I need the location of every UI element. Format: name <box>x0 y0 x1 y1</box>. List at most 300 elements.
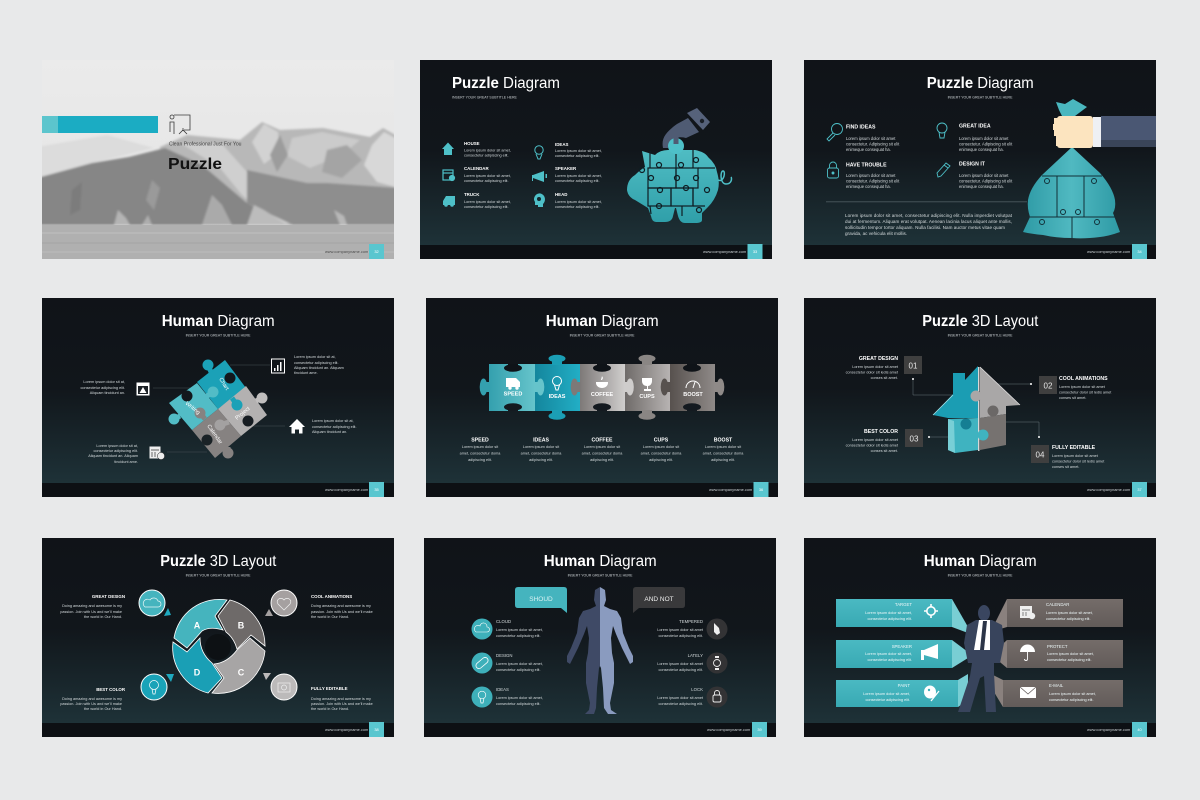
text: best color: Doing amazing and awesome is my <box>62 697 122 701</box>
footer url: www.companyname.com <box>325 249 368 254</box>
text: ideas <box>496 687 543 706</box>
jigsaw diamond <box>168 360 268 458</box>
text: cool animations: the world in Our Hand. <box>311 615 349 619</box>
text: design it: DESIGN IT <box>959 162 986 168</box>
text: great idea: consectetur. Adipiscing sit elit <box>959 142 1013 146</box>
text: lately: consectetur adipiscing elit. <box>658 668 703 672</box>
human figure <box>567 587 633 714</box>
column: boost: Lorem ipsum dolor sit <box>705 445 742 449</box>
segment labels: B <box>238 620 245 630</box>
text: design it: enimeque consequat ha. <box>959 184 1004 189</box>
connector lines <box>913 379 1039 437</box>
text: target: Lorem ipsum dolor sit amet, <box>865 611 912 615</box>
subtitle: INSERT YOUR GREAT SUBTITLE HERE <box>452 96 517 100</box>
text: have trouble: HAVE TROUBLE <box>846 162 887 168</box>
text: best color <box>846 429 899 453</box>
text: best color: conses sit amet. <box>871 449 898 453</box>
ribbon: e-mail <box>989 673 1123 707</box>
slide background <box>804 538 1156 737</box>
segment labels: A <box>194 620 201 630</box>
text: lock: Lorem ipsum dolor sit amet <box>657 696 704 700</box>
column: speed: SPEED <box>471 438 489 444</box>
icon: palette <box>924 686 939 701</box>
text: great design: the world in Our Hand. <box>84 615 122 619</box>
text: lately: LATELY <box>688 653 703 658</box>
footer bar <box>420 245 772 259</box>
text: speaker: SPEAKER <box>892 644 912 649</box>
label: speed: SPEED <box>504 392 522 398</box>
speech bubble: shoud: SHOUD <box>529 596 553 603</box>
subtitle: INSERT YOUR GREAT SUBTITLE HERE <box>568 574 633 578</box>
page number tab: 34 <box>1137 249 1142 254</box>
text: e-mail: E-MAIL <box>1049 683 1064 688</box>
page number tab <box>1132 722 1147 737</box>
text: top right: Aliquam tincidunt an. Aliquam <box>294 366 344 370</box>
column: cups <box>641 438 682 462</box>
text: protect: PROTECT <box>1047 644 1068 649</box>
page number tab <box>754 482 768 497</box>
text: lately <box>657 653 704 672</box>
text: top right: tincidunt ame. <box>294 371 318 375</box>
column: speed: adipiscing elit. <box>468 458 492 462</box>
text: left <box>80 380 125 395</box>
column: speed <box>460 438 501 462</box>
icon: target <box>924 604 938 618</box>
text: fully editable <box>1052 445 1105 469</box>
text: house: consectetur adipiscing elit. <box>464 154 509 158</box>
text: cloud: CLOUD <box>496 619 511 624</box>
text: bottom left: Lorem ipsum dolor sit at, <box>96 444 138 448</box>
text: head: consectetur adipiscing elit. <box>555 205 600 209</box>
text: great design <box>60 594 125 619</box>
page number tab: 38 <box>374 727 379 732</box>
page number tab <box>748 244 762 259</box>
title: Puzzle Diagram <box>927 75 1034 92</box>
text: design it: Lorem ipsum dolor sit amet <box>959 173 1009 178</box>
text: best color: consectetur dolor sit ledis amet <box>846 444 899 448</box>
text: cool animations: consectetur dolor sit ledis amet <box>1059 390 1112 394</box>
text: best color: BEST COLOR <box>96 687 126 692</box>
text: fully editable: conses sit amet. <box>1052 465 1079 469</box>
text: fully editable: FULLY EDITABLE <box>311 686 348 691</box>
text: target: consectetur adipiscing elit. <box>867 617 912 621</box>
text: have trouble: enimeque consequat ha. <box>846 184 891 189</box>
icon: gauge <box>686 381 700 388</box>
text: speaker: SPEAKER <box>555 166 577 171</box>
text: left: Aliquam tincidunt an. <box>90 391 125 395</box>
column: cups: amet, consectetur doma <box>641 452 682 456</box>
text: speaker <box>555 166 602 183</box>
icon: bulb <box>535 146 543 159</box>
text: great design: Doing amazing and awesome is my <box>62 604 122 608</box>
paragraph: gravida, ac vehicula elit mollis. <box>845 231 907 236</box>
text: ideas: IDEAS <box>496 687 509 692</box>
text: truck: consectetur adipiscing elit. <box>464 205 509 209</box>
connector lines <box>153 365 285 452</box>
circle icon: bandage <box>472 652 492 674</box>
footer bar <box>424 723 776 737</box>
text: find ideas <box>846 124 900 152</box>
text: target <box>865 602 912 621</box>
text: cool animations <box>311 594 373 619</box>
speech bubble: and not <box>633 587 685 613</box>
icon: umbrella <box>1020 644 1035 660</box>
label: ideas: IDEAS <box>549 394 566 400</box>
ribbon: target <box>836 599 968 633</box>
teal bar accent <box>42 116 158 133</box>
hand holding bag <box>1053 116 1156 148</box>
page number tab: 40 <box>1137 727 1142 732</box>
column: cups: adipiscing elit. <box>649 458 673 462</box>
footer url: www.companyname.com <box>1087 249 1130 254</box>
piece label: chart: Chart <box>217 377 230 392</box>
label: coffee: COFFEE <box>591 392 613 398</box>
circle icon: cloud <box>139 590 165 616</box>
text: ideas: consectetur adipiscing elit. <box>496 702 541 706</box>
text: right: Aliquam tincidunt an. <box>312 430 347 434</box>
text: great design: conses sit amet. <box>871 376 898 380</box>
text: speaker <box>865 644 912 662</box>
page number tab <box>369 244 384 259</box>
circle icon: heart <box>271 590 297 616</box>
label: boost: BOOST <box>683 392 703 398</box>
slide background <box>42 298 394 497</box>
text: calendar: CALENDAR <box>1046 602 1069 607</box>
text: e-mail: Lorem ipsum dolor sit amet, <box>1049 692 1096 696</box>
title: Human Diagram <box>924 553 1037 570</box>
paragraph <box>845 213 1013 236</box>
page number tab: 39 <box>757 727 762 732</box>
text: top right: consectetur adipiscing elit. <box>294 361 339 365</box>
text: best color: Lorem ipsum dolor sit amet <box>852 438 899 442</box>
text: great design: Lorem ipsum dolor sit amet <box>852 365 899 369</box>
text: calendar: consectetur adipiscing elit. <box>464 179 509 183</box>
label: cups: CUPS <box>639 394 655 400</box>
number box 04: 04 <box>1036 450 1045 460</box>
text: paint <box>863 683 910 702</box>
icon: envelope <box>1020 687 1036 698</box>
panel: five piece puzzle row <box>426 298 778 497</box>
icon: calendar check <box>1020 606 1035 619</box>
icon: megaphone <box>921 644 938 660</box>
footer url: www.companyname.com <box>325 727 368 732</box>
segment labels: C <box>238 668 245 678</box>
text: cool animations: COOL ANIMATIONS <box>311 594 352 599</box>
text: truck: TRUCK <box>464 192 480 197</box>
piece label: project: Project <box>234 406 252 422</box>
subtitle: INSERT YOUR GREAT SUBTITLE HERE <box>948 574 1013 578</box>
page number tab <box>369 722 384 737</box>
text: calendar <box>464 166 511 183</box>
text: fully editable: Lorem ipsum dolor sit amet <box>1052 454 1099 458</box>
column: speed: amet, consectetur doma <box>460 452 501 456</box>
page number tab <box>1132 482 1147 497</box>
footer url: www.companyname.com <box>1087 727 1130 732</box>
number box 03 <box>905 429 923 447</box>
text: fully editable: Doing amazing and awesome is my <box>311 697 371 701</box>
column: coffee: COFFEE <box>591 438 613 444</box>
column: speed: Lorem ipsum dolor sit <box>462 445 499 449</box>
column: cups: Lorem ipsum dolor sit <box>643 445 680 449</box>
ribbon: protect <box>993 640 1123 668</box>
icon: presenter at board <box>170 115 190 134</box>
number box 02 <box>1039 376 1057 394</box>
footer bar <box>804 245 1156 259</box>
page number tab: 36 <box>759 487 763 492</box>
text: find ideas: consectetur. Adipiscing sit elit <box>846 142 900 146</box>
circle icon: bulb <box>472 686 492 708</box>
text: head <box>555 192 602 209</box>
column: ideas: amet, consectetur doma <box>521 452 562 456</box>
text: right: Lorem ipsum dolor sit at, <box>312 419 354 423</box>
piece label: writing: Writing <box>184 401 201 416</box>
text: speaker: Lorem ipsum dolor sit amet, <box>555 174 602 178</box>
column: coffee: amet, consectetur doma <box>582 452 623 456</box>
text: have trouble: consectetur. Adipiscing sit elit <box>846 178 900 184</box>
text: e-mail <box>1049 683 1096 702</box>
text: find ideas: Lorem ipsum dolor sit amet <box>846 136 896 141</box>
icon: padlock <box>828 162 838 178</box>
text: calendar: consectetur adipiscing elit. <box>1046 617 1091 621</box>
text: cool animations: COOL ANIMATIONS <box>1059 376 1108 382</box>
text: tempered: consectetur adipiscing elit. <box>658 634 703 638</box>
piggy bank <box>627 108 731 223</box>
text: lately: Lorem ipsum dolor sit amet <box>657 662 704 666</box>
text: top right <box>294 355 344 375</box>
icon: calendar check <box>150 446 165 460</box>
text: ideas: Lorem ipsum dolor sit amet, <box>555 149 602 153</box>
text: paint: PAINT <box>898 683 910 688</box>
text: speaker: Lorem ipsum dolor sit amet, <box>865 652 912 656</box>
page number tab: 35 <box>374 487 379 492</box>
text: great design: GREAT DESIGN <box>92 594 125 599</box>
3D puzzle house <box>933 366 1020 453</box>
text: tempered: TEMPERED <box>679 619 703 624</box>
text: best color: the world in Our Hand. <box>84 707 122 711</box>
photo: grayscale mountain lake <box>42 121 394 259</box>
text: cloud: Lorem ipsum dolor sit amet, <box>496 628 543 632</box>
text: ideas: Lorem ipsum dolor sit amet, <box>496 696 543 700</box>
icon: trophy <box>642 378 652 391</box>
title: Human Diagram <box>544 553 657 570</box>
icon: house <box>442 142 454 155</box>
title: Human Diagram <box>162 313 275 330</box>
panel: money bag puzzle <box>804 60 1156 259</box>
text: design it <box>959 162 1013 189</box>
number box 01 <box>904 356 922 374</box>
puzzle row <box>480 355 724 420</box>
text: great design: passion. Join with Us and we'll make <box>60 610 122 614</box>
text: design: DESIGN <box>496 653 512 658</box>
text: calendar: CALENDAR <box>464 166 489 171</box>
text: great design: GREAT DESIGN <box>859 356 898 362</box>
text: lock <box>657 687 704 706</box>
column: boost: amet, consectetur doma <box>703 452 744 456</box>
text: house: Lorem ipsum dolor sit amet, <box>464 148 511 152</box>
pointer triangles <box>164 608 273 682</box>
text: fully editable <box>311 686 373 711</box>
text: right <box>312 419 357 434</box>
text: cloud: consectetur adipiscing elit. <box>496 634 541 638</box>
icon: pencil <box>937 163 950 177</box>
slide background <box>420 60 772 259</box>
ribbon: speaker <box>836 640 968 668</box>
text: bottom left: consectetur adipiscing elit. <box>93 449 138 453</box>
column: coffee <box>582 438 623 462</box>
circle icon: camera <box>271 674 297 700</box>
icon: magnifier <box>827 124 842 141</box>
cover title: Puzzle <box>168 156 222 173</box>
page number tab: 33 <box>753 249 757 254</box>
text: ideas <box>555 142 602 158</box>
circle icon: bulb <box>141 674 167 700</box>
text: target: TARGET <box>895 602 912 607</box>
text: bottom left <box>88 444 138 464</box>
text: fully editable: the world in Our Hand. <box>311 707 349 711</box>
title: Puzzle 3D Layout <box>922 313 1039 330</box>
subtitle: INSERT YOUR GREAT SUBTITLE HERE <box>186 334 251 338</box>
text: design: Lorem ipsum dolor sit amet, <box>496 662 543 666</box>
text: tempered <box>657 619 704 638</box>
page number tab: 32 <box>374 249 379 254</box>
text: best color: passion. Join with Us and we'll make <box>60 702 122 706</box>
icon: head <box>534 193 545 207</box>
text: have trouble: Lorem ipsum dolor sit amet <box>846 173 896 178</box>
text: lock: consectetur adipiscing elit. <box>658 702 703 706</box>
page number tab <box>1132 244 1147 259</box>
text: cool animations <box>1059 376 1112 400</box>
text: protect <box>1047 644 1094 662</box>
column: coffee: Lorem ipsum dolor sit <box>584 445 621 449</box>
text: great idea <box>959 124 1013 152</box>
footer bar <box>804 723 1156 737</box>
number box 02: 02 <box>1044 382 1053 390</box>
circle icon: watch <box>706 652 728 674</box>
text: paint: Lorem ipsum dolor sit amet, <box>863 692 910 696</box>
text: calendar: Lorem ipsum dolor sit amet, <box>464 174 511 178</box>
icon: coffee cup <box>596 376 608 388</box>
paragraph: sollicitudin tempor tortor aliquam. Nulla facilisi. Nam auctor metus vitae quam <box>845 225 1005 230</box>
icon: calendar <box>443 170 454 180</box>
footer url: www.companyname.com <box>1087 487 1130 492</box>
icon: home <box>289 419 305 434</box>
segment labels <box>194 620 245 678</box>
panel: cover slide <box>42 114 394 259</box>
businessman silhouette <box>958 605 1004 712</box>
footer url: www.companyname.com <box>325 487 368 492</box>
text: cloud <box>496 619 543 638</box>
panel: piggy bank puzzle <box>420 60 772 259</box>
icon: warning window <box>136 382 150 396</box>
text: head: Lorem ipsum dolor sit amet, <box>555 200 602 204</box>
text: fully editable: consectetur dolor sit ledis amet <box>1052 460 1105 464</box>
text: left: consectetur adipiscing elit. <box>80 386 125 390</box>
text: speaker: consectetur adipiscing elit. <box>867 658 912 662</box>
text: left: Lorem ipsum dolor sit at, <box>83 380 125 384</box>
footer url: www.companyname.com <box>709 487 752 492</box>
number box 03: 03 <box>910 434 919 444</box>
text: have trouble <box>846 162 900 189</box>
number box 01: 01 <box>909 362 918 370</box>
icon: bar chart <box>272 359 284 373</box>
slide background <box>424 538 776 737</box>
text: tempered: Lorem ipsum dolor sit amet <box>657 628 704 632</box>
text: house: HOUSE <box>464 141 480 146</box>
circle icon: flame hand <box>706 618 728 640</box>
text: fully editable: FULLY EDITABLE <box>1052 445 1096 451</box>
panel: circular ABCD cycle <box>42 538 394 737</box>
text: design: consectetur adipiscing elit. <box>496 668 541 672</box>
text: truck: Lorem ipsum dolor sit amet, <box>464 200 511 204</box>
title: Human Diagram <box>546 313 659 330</box>
footer bar <box>426 483 778 497</box>
footer bar <box>42 483 394 497</box>
column: ideas: adipiscing elit. <box>529 458 553 462</box>
slide background <box>804 60 1156 259</box>
page number tab <box>369 482 384 497</box>
text: find ideas: enimeque consequat ha. <box>846 147 891 152</box>
text: calendar: Lorem ipsum dolor sit amet, <box>1046 611 1093 615</box>
text: find ideas: FIND IDEAS <box>846 124 876 130</box>
money bag <box>1023 99 1120 238</box>
text: cool animations: conses sit amet. <box>1059 396 1086 400</box>
column: ideas <box>521 438 562 462</box>
text: truck <box>464 192 511 209</box>
slide background <box>426 298 778 497</box>
number box 04 <box>1031 445 1049 463</box>
footer url: www.companyname.com <box>703 249 746 254</box>
title: Puzzle 3D Layout <box>160 553 277 570</box>
text: protect: consectetur adipiscing elit. <box>1047 658 1092 662</box>
speech bubble: shoud <box>515 587 567 613</box>
panel: human figure do and don't <box>424 538 776 737</box>
text: calendar <box>1046 602 1093 621</box>
text: design <box>496 653 543 672</box>
text: top right: Lorem ipsum dolor sit at, <box>294 355 336 359</box>
icon: bulb outline <box>937 123 947 138</box>
footer url: www.companyname.com <box>707 727 750 732</box>
text: cool animations: Lorem ipsum dolor sit amet <box>1059 385 1106 389</box>
ring diagram <box>173 599 265 693</box>
column: ideas: Lorem ipsum dolor sit <box>523 445 560 449</box>
column: cups: CUPS <box>654 438 669 444</box>
icon: speaker <box>532 171 547 182</box>
icon: truck <box>443 196 455 207</box>
subtitle: INSERT YOUR GREAT SUBTITLE HERE <box>186 574 251 578</box>
text: cool animations: passion. Join with Us and we'll make <box>311 610 373 614</box>
connector dots <box>912 378 1040 438</box>
panel: businessman ribbons <box>804 538 1156 737</box>
page number tab: 37 <box>1137 487 1142 492</box>
page number tab <box>752 722 767 737</box>
segment labels: D <box>194 668 201 678</box>
text: protect: Lorem ipsum dolor sit amet, <box>1047 652 1094 656</box>
text: design it: consectetur. Adipiscing sit elit <box>959 178 1013 184</box>
footer bar <box>42 723 394 737</box>
paragraph: dui at fermentum. Aliquam erat volutpat. Aenean lacinia lacus aliquet ante mollis, <box>845 219 1012 224</box>
text: cool animations: Doing amazing and awesome is my <box>311 604 371 608</box>
title: Puzzle Diagram <box>452 75 560 92</box>
subtitle: INSERT YOUR GREAT SUBTITLE HERE <box>948 334 1013 338</box>
text: ideas: consectetur adipiscing elit. <box>555 154 600 158</box>
text: bottom left: Aliquam tincidunt an. Aliquam <box>88 454 138 458</box>
text: best color <box>60 687 126 711</box>
piece label: calendar: Calendar <box>205 424 223 446</box>
text: house <box>464 141 511 158</box>
text: ideas: IDEAS <box>555 142 568 147</box>
ribbon: calendar <box>995 599 1123 630</box>
text: great design <box>846 356 899 380</box>
